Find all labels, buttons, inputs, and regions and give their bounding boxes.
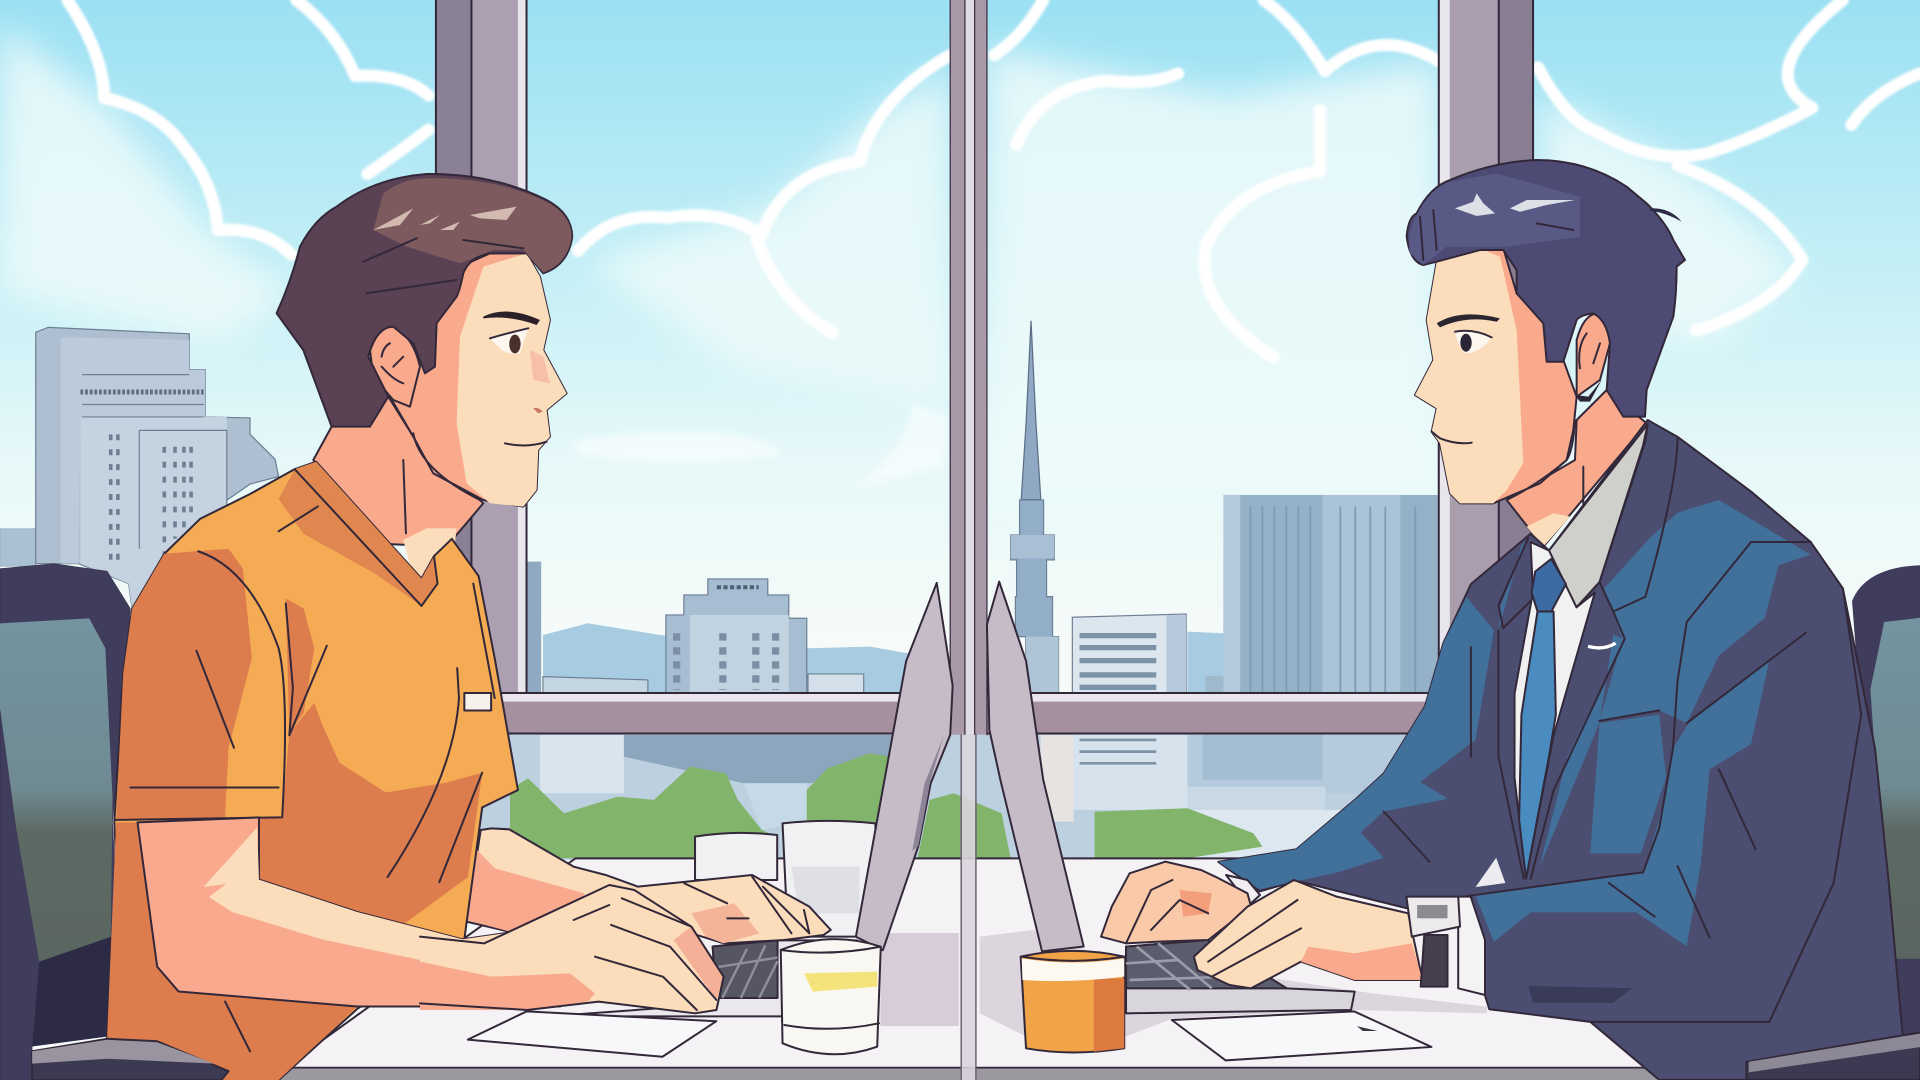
front hand — [1194, 880, 1422, 988]
right armrest — [1746, 1032, 1920, 1080]
orange shirt — [104, 462, 560, 1080]
eye — [490, 328, 528, 354]
brow — [483, 312, 540, 325]
ear — [1577, 313, 1611, 397]
white cup left — [781, 939, 881, 1054]
orange drink cup right — [1021, 951, 1124, 1052]
suit seams — [1384, 437, 1861, 1022]
wristwatch — [1421, 935, 1448, 987]
ear — [370, 327, 420, 407]
eye — [1455, 331, 1492, 353]
back hand — [1101, 862, 1251, 943]
man right in blue suit — [1218, 160, 1903, 1080]
centre divider — [961, 735, 976, 1080]
back arm — [466, 828, 831, 943]
city skyline centre: mountains and buildings — [525, 562, 1223, 693]
green trees — [510, 753, 1262, 858]
lower city view below the window rail — [471, 733, 1454, 860]
laptop right — [987, 582, 1355, 1013]
brow — [1437, 314, 1500, 327]
city buildings right — [1072, 495, 1439, 693]
paper sheet right — [1172, 1011, 1431, 1060]
city buildings left — [0, 327, 279, 608]
window frame — [436, 0, 1533, 735]
table glimpse under the arm — [1476, 858, 1505, 887]
drinking glasses at the back — [695, 821, 875, 937]
mouth and jaw — [403, 433, 547, 533]
blue suit — [1218, 420, 1903, 1080]
necktie — [1519, 611, 1556, 879]
table — [279, 858, 1663, 1080]
clouds — [0, 0, 1920, 490]
head of right man — [1407, 160, 1685, 547]
hair — [277, 174, 572, 427]
hand of left man on keyboard — [420, 885, 724, 1013]
laptop left — [549, 583, 953, 1016]
hands and watch of right man — [1101, 862, 1485, 995]
left armrest — [32, 1039, 229, 1080]
man left in orange t-shirt — [104, 174, 831, 1080]
front arm — [138, 817, 560, 1006]
paper sheet left — [468, 1011, 716, 1057]
head of left man — [277, 174, 572, 590]
cowlick — [1650, 208, 1682, 222]
shirt cuff — [1458, 897, 1485, 995]
right chair — [1852, 565, 1920, 1080]
shirt and collar — [1515, 424, 1648, 879]
mouth and jaw — [1432, 420, 1583, 517]
left chair — [0, 564, 130, 1080]
tower — [1011, 321, 1059, 693]
hair — [1407, 160, 1685, 417]
